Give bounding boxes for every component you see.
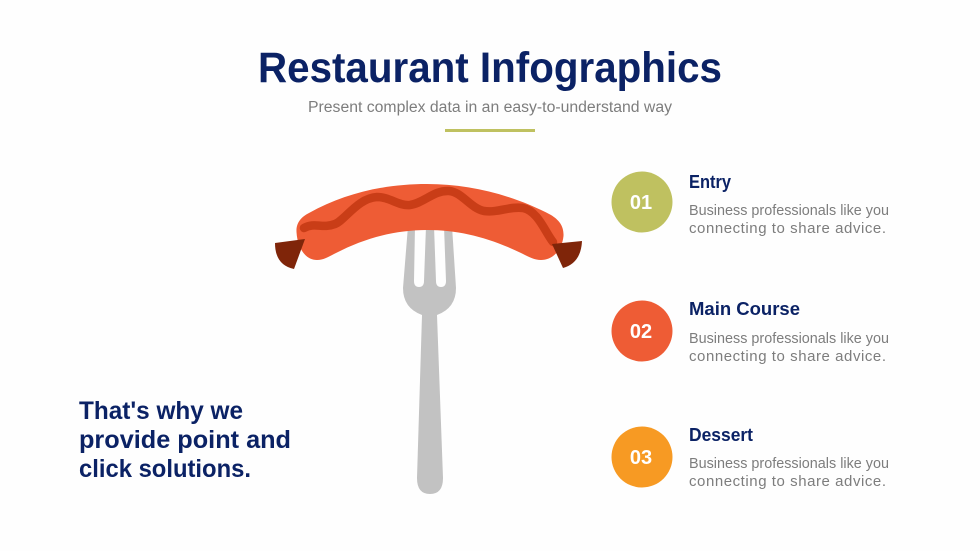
heading: Dessert: Dessert xyxy=(689,425,753,445)
item 03: Dessert: connecting to share advice. xyxy=(689,473,886,490)
description: Business professionals like you xyxy=(689,202,889,219)
item 02: Main Course: 02 xyxy=(630,321,652,343)
icon: right sausage end xyxy=(552,241,582,268)
title underline xyxy=(445,129,535,132)
item 03: Dessert: 03 xyxy=(630,447,652,469)
icon: fork xyxy=(403,226,456,494)
heading: Main Course: Main Course xyxy=(689,299,800,319)
badge 02 xyxy=(612,300,672,362)
heading: Entry: Entry xyxy=(689,172,731,192)
icon: sausage body xyxy=(296,184,564,260)
callout text: That's why we xyxy=(79,397,243,425)
item 03: Dessert xyxy=(612,425,889,490)
item 02: Main Course: connecting to share advice. xyxy=(689,348,886,365)
subtitle: Present complex data in an easy-to-understand way xyxy=(308,99,672,116)
callout text: click solutions. xyxy=(79,455,251,483)
item 01: Entry xyxy=(612,172,889,237)
badge 01 xyxy=(612,172,672,232)
illustration: sausage on fork xyxy=(275,184,582,494)
badge 03 xyxy=(612,426,672,488)
icon: mustard line xyxy=(304,191,553,242)
description: Business professionals like you xyxy=(689,330,889,347)
item 01: Entry: connecting to share advice. xyxy=(689,220,886,237)
title: Restaurant Infographics xyxy=(258,44,722,92)
icon: left sausage end xyxy=(275,239,305,269)
callout text xyxy=(79,397,291,483)
item 01: Entry: 01 xyxy=(630,192,652,214)
item 02: Main Course xyxy=(612,299,889,365)
callout text: provide point and xyxy=(79,426,291,454)
description: Business professionals like you xyxy=(689,455,889,472)
